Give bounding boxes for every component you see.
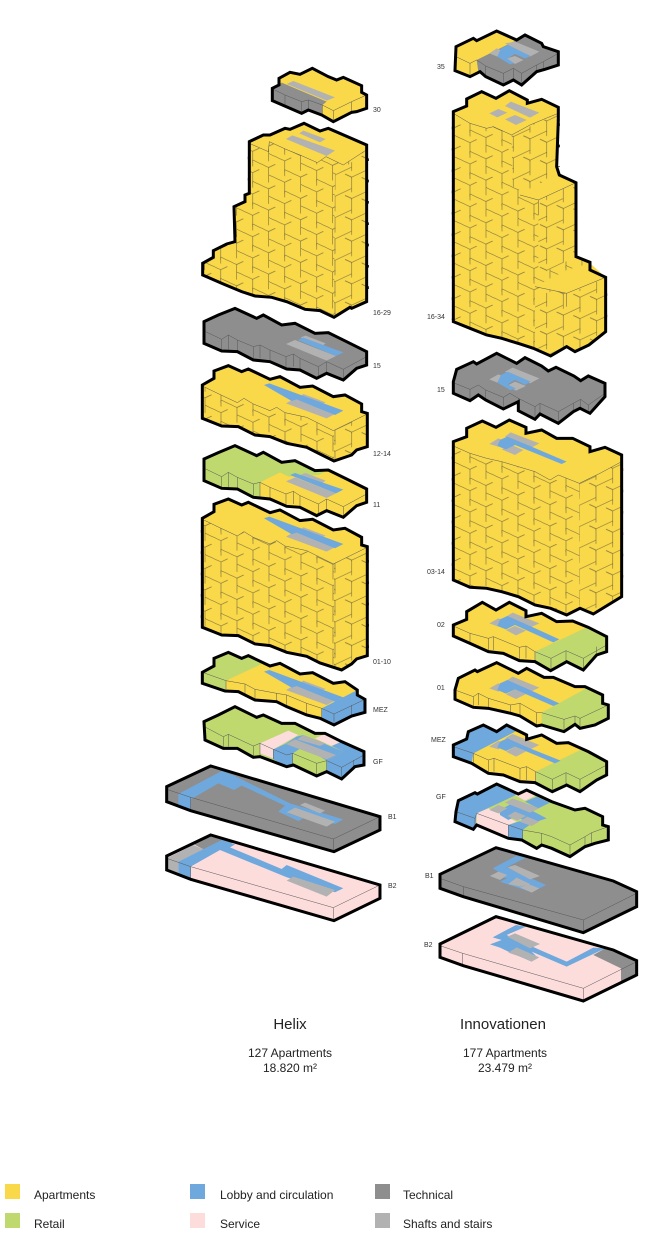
Helix statistics: 18.820 m² xyxy=(263,1061,317,1075)
Innovationen basement B1 xyxy=(440,848,637,933)
Innovationen statistics xyxy=(463,1046,547,1075)
Helix statistics xyxy=(248,1046,332,1075)
Innovationen mezzanine floor xyxy=(453,725,607,792)
Helix floor 30 label: 30 xyxy=(373,107,381,114)
Helix mezzanine label: MEZ xyxy=(373,707,388,714)
legend: lobby and circulation: Lobby and circulation xyxy=(220,1188,333,1202)
Innovationen floor 15 xyxy=(453,353,605,423)
Helix floors 12-14 label: 12-14 xyxy=(373,451,391,458)
legend: retail xyxy=(5,1213,65,1231)
legend: shafts and stairs: Shafts and stairs xyxy=(403,1217,492,1231)
Innovationen statistics: 23.479 m² xyxy=(478,1061,532,1075)
Innovationen ground floor label: GF xyxy=(436,794,446,801)
legend: apartments: Apartments xyxy=(34,1188,95,1202)
Innovationen basement B2 xyxy=(440,917,637,1001)
Innovationen floor 15 label: 15 xyxy=(437,387,445,394)
Helix floors 01-10 xyxy=(202,499,368,670)
Innovationen basement B2 label: B2 xyxy=(424,942,433,949)
Helix basement B1 label: B1 xyxy=(388,814,397,821)
Helix floor 15 xyxy=(204,308,367,380)
Helix ground floor xyxy=(204,707,364,779)
legend: technical xyxy=(375,1184,453,1202)
Helix floors 12-14 xyxy=(202,366,367,461)
legend: apartments xyxy=(5,1184,95,1202)
Helix statistics: 127 Apartments xyxy=(248,1046,332,1060)
Helix floor 11 xyxy=(204,446,367,517)
Helix floor 11 label: 11 xyxy=(373,502,380,509)
Innovationen basement B1 label: B1 xyxy=(425,873,434,880)
Helix mezzanine floor xyxy=(202,652,365,725)
Helix floors 16-29 tower xyxy=(203,123,368,317)
legend: technical: Technical xyxy=(403,1188,453,1202)
Innovationen floor 02 label: 02 xyxy=(437,622,445,629)
Innovationen floor 01 xyxy=(455,663,608,732)
legend: service xyxy=(190,1213,260,1231)
Innovationen statistics: 177 Apartments xyxy=(463,1046,547,1060)
legend: shafts and stairs xyxy=(375,1213,492,1231)
legend: lobby and circulation xyxy=(190,1184,333,1202)
Innovationen mezzanine label: MEZ xyxy=(431,737,446,744)
Innovationen floors 16-34 label: 16-34 xyxy=(427,314,445,321)
Helix floor 15 label: 15 xyxy=(373,363,381,370)
legend xyxy=(5,1184,492,1231)
Innovationen floor 35 xyxy=(455,31,558,85)
Helix basement B1 xyxy=(167,766,380,852)
Innovationen floor 35 label: 35 xyxy=(437,64,445,71)
Innovationen floors 03-14 xyxy=(453,420,622,615)
Innovationen floor 01 label: 01 xyxy=(437,685,445,692)
Innovationen floor 02 xyxy=(453,602,607,671)
Helix floors 01-10 label: 01-10 xyxy=(373,659,391,666)
Helix basement B2 xyxy=(167,835,380,921)
Helix floor 30 xyxy=(272,68,367,122)
Innovationen floors 16-34 tower xyxy=(453,91,606,356)
legend: retail: Retail xyxy=(34,1217,65,1231)
legend: service: Service xyxy=(220,1217,260,1231)
Helix ground floor label: GF xyxy=(373,759,383,766)
Helix floors 16-29 label: 16-29 xyxy=(373,310,391,317)
Innovationen ground floor xyxy=(455,784,608,857)
Helix basement B2 label: B2 xyxy=(388,883,397,890)
Innovationen heading: Innovationen xyxy=(460,1016,546,1033)
Innovationen floors 03-14 label: 03-14 xyxy=(427,569,445,576)
Helix heading: Helix xyxy=(273,1016,307,1033)
